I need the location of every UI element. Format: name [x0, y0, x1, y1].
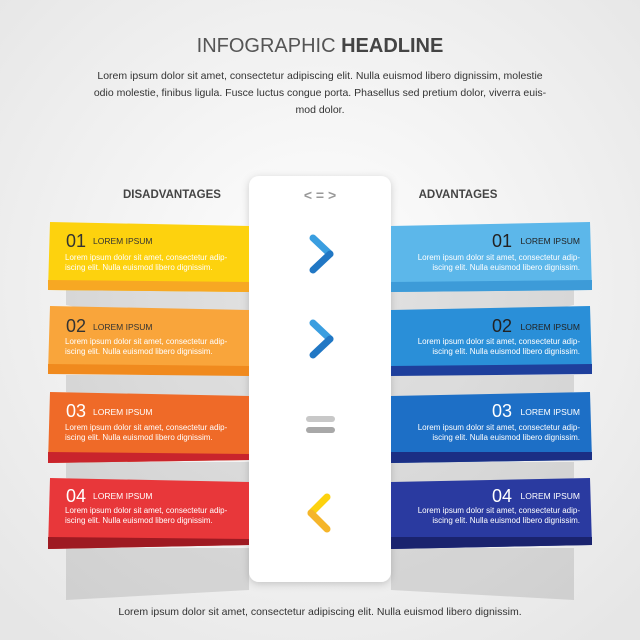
icon: arrow 2: [313, 323, 330, 355]
icon: arrow 4: [311, 497, 327, 529]
panel: disadvantage 02: 02: [66, 316, 86, 336]
icon: equals: [309, 419, 332, 430]
icon: arrow 1: [313, 238, 330, 270]
panel: disadvantage 03: iscing elit. Nulla euismod libero dignissim.: [65, 433, 213, 442]
panel: advantage 01: [391, 222, 592, 292]
intro text: Lorem ipsum dolor sit amet, consectetur adipiscing elit. Nulla euismod libero dignissim, molestie: [97, 70, 543, 82]
intro text: odio molestie, finibus ligula. Fusce luctus congue porta. Phasellus sed pretium dolor, viverra euis-: [94, 87, 547, 99]
panel: advantage 03: 03: [492, 401, 512, 421]
panel: advantage 02: iscing elit. Nulla euismod libero dignissim.: [432, 347, 580, 356]
panel: advantage 04: [391, 478, 592, 549]
panel: advantage 04: LOREM IPSUM: [520, 491, 580, 501]
panel: disadvantage 03: 03: [66, 401, 86, 421]
intro text: [94, 70, 547, 116]
panel: disadvantage 01: 01: [66, 231, 86, 251]
panel: disadvantage 04: LOREM IPSUM: [93, 491, 153, 501]
heading: advantages: ADVANTAGES: [419, 189, 498, 201]
panel: advantage 04: Lorem ipsum dolor sit amet, consectetur adip-: [418, 506, 580, 515]
panel: disadvantage 02: [48, 306, 249, 376]
panel: disadvantage 04: Lorem ipsum dolor sit amet, consectetur adip-: [65, 506, 228, 515]
panel: advantage 04: 04: [492, 486, 512, 506]
panel: advantage 03: [391, 392, 592, 463]
panel: advantage 01: LOREM IPSUM: [520, 236, 580, 246]
panel: advantage 01: 01: [492, 231, 512, 251]
panel: advantage 03: LOREM IPSUM: [520, 407, 580, 417]
panel: disadvantage 03: LOREM IPSUM: [93, 407, 153, 417]
panel: advantage 01: iscing elit. Nulla euismod libero dignissim.: [432, 263, 580, 272]
shadows between rows: [66, 290, 574, 600]
intro text: mod dolor.: [295, 104, 345, 116]
panel: advantage 03: iscing elit. Nulla euismod libero dignissim.: [432, 433, 580, 442]
panel: advantage 02: Lorem ipsum dolor sit amet, consectetur adip-: [418, 337, 580, 346]
panel: advantage 02: LOREM IPSUM: [520, 322, 580, 332]
panel: disadvantage 04: iscing elit. Nulla euismod libero dignissim.: [65, 516, 213, 525]
icon: compare symbols: < = >: [304, 187, 336, 203]
heading: disadvantages: DISADVANTAGES: [123, 189, 221, 201]
panel: advantage 02: [391, 306, 592, 376]
panel: disadvantage 02: LOREM IPSUM: [93, 322, 153, 332]
panel: disadvantage 02: Lorem ipsum dolor sit amet, consectetur adip-: [65, 337, 228, 346]
panel: disadvantage 01: LOREM IPSUM: [93, 236, 153, 246]
panel: advantage 01: Lorem ipsum dolor sit amet, consectetur adip-: [418, 253, 580, 262]
footer text: Lorem ipsum dolor sit amet, consectetur adipiscing elit. Nulla euismod libero dignissim.: [118, 606, 522, 618]
panel: disadvantage 03: Lorem ipsum dolor sit amet, consectetur adip-: [65, 423, 228, 432]
panel: disadvantage 01: [48, 222, 249, 292]
panel: disadvantage 01: iscing elit. Nulla euismod libero dignissim.: [65, 263, 213, 272]
panel: disadvantage 03: [48, 392, 249, 463]
title: INFOGRAPHIC HEADLINE: [197, 35, 443, 57]
panel: disadvantage 01: Lorem ipsum dolor sit amet, consectetur adip-: [65, 253, 228, 262]
center panel: [249, 176, 391, 582]
panel: disadvantage 04: [48, 478, 249, 549]
panel: advantage 02: 02: [492, 316, 512, 336]
panel: disadvantage 02: iscing elit. Nulla euismod libero dignissim.: [65, 347, 213, 356]
panel: advantage 03: Lorem ipsum dolor sit amet, consectetur adip-: [418, 423, 580, 432]
panel: disadvantage 04: 04: [66, 486, 86, 506]
panel: advantage 04: iscing elit. Nulla euismod libero dignissim.: [432, 516, 580, 525]
